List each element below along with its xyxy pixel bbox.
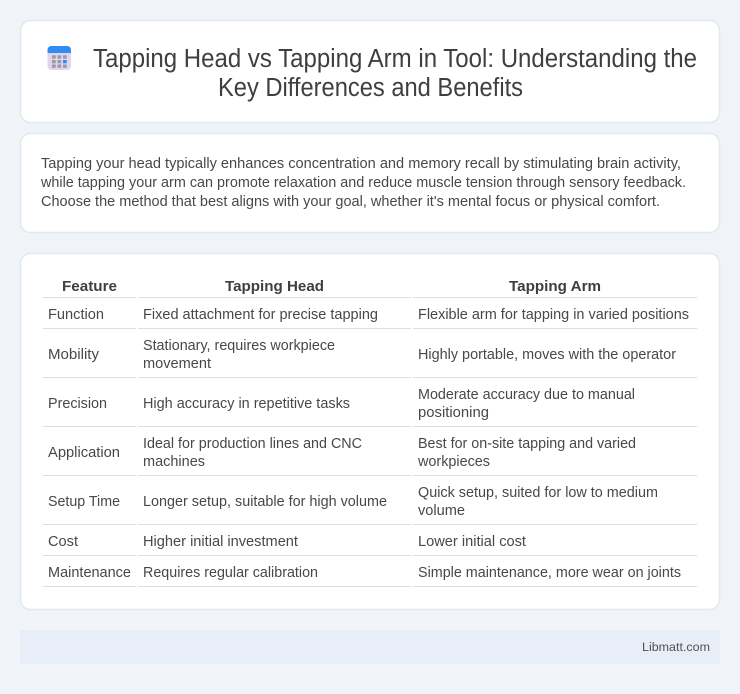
footer: [20, 630, 720, 664]
row: setup time: [48, 485, 658, 519]
panel: comparison table: [20, 254, 720, 610]
title: [93, 45, 697, 102]
row: function: Fixed attachment for precise tapping: [143, 307, 378, 323]
table header: Tapping Arm: [509, 278, 601, 295]
row: mobility: Highly portable, moves with the operator: [418, 347, 676, 363]
row: cost: Cost: [48, 534, 78, 550]
row: application: Ideal for production lines and CNC: [143, 436, 362, 452]
panel: title card: [20, 20, 720, 122]
panel: introduction: [20, 134, 720, 232]
row: maintenance: [48, 565, 681, 581]
table header: [62, 278, 601, 295]
footer: Libmatt.com: [642, 640, 710, 654]
title: Key Differences and Benefits: [218, 74, 523, 102]
row: mobility: Mobility: [48, 347, 100, 363]
row: setup time: Longer setup, suitable for high volume: [143, 494, 387, 510]
row: application: Best for on-site tapping and varied: [418, 436, 636, 452]
row: mobility: [48, 338, 676, 372]
row: setup time: volume: [418, 503, 465, 519]
row: application: Application: [48, 445, 120, 461]
row: maintenance: Simple maintenance, more wear on joints: [418, 565, 681, 581]
text block: introduction: Choose the method that best aligns with your goal, whether it's mental focus or physical comfort.: [41, 194, 660, 210]
row: cost: [48, 534, 526, 550]
title: Tapping Head vs Tapping Arm in Tool: Understanding the: [93, 45, 697, 73]
row: precision: Moderate accuracy due to manual: [418, 387, 635, 403]
row: function: [48, 307, 689, 323]
row: setup time: Setup Time: [48, 494, 120, 510]
table header: Tapping Head: [225, 278, 324, 295]
row: mobility: Stationary, requires workpiece: [143, 338, 335, 354]
table header: Feature: [62, 278, 117, 295]
row: precision: [48, 387, 635, 421]
text block: introduction: while tapping your arm can promote relaxation and reduce muscle tension through sensory feedback.: [40, 175, 686, 191]
text block: introduction: [40, 156, 686, 210]
row: setup time: Quick setup, suited for low to medium: [418, 485, 658, 501]
row: precision: Precision: [48, 396, 107, 412]
icon: calendar: [48, 46, 71, 70]
row: application: [48, 436, 636, 470]
row: mobility: movement: [143, 356, 211, 372]
row: application: machines: [143, 454, 205, 470]
row: cost: Lower initial cost: [418, 534, 526, 550]
row: function: Flexible arm for tapping in varied positions: [418, 307, 689, 323]
row: maintenance: Requires regular calibration: [143, 565, 318, 581]
row: precision: High accuracy in repetitive tasks: [143, 396, 350, 412]
row: precision: positioning: [418, 405, 489, 421]
text block: introduction: Tapping your head typically enhances concentration and memory recall by stimulating brain activity,: [41, 156, 681, 172]
row: application: workpieces: [417, 454, 490, 470]
row: maintenance: Maintenance: [48, 565, 131, 581]
row: function: Function: [48, 307, 104, 323]
row: cost: Higher initial investment: [143, 534, 298, 550]
